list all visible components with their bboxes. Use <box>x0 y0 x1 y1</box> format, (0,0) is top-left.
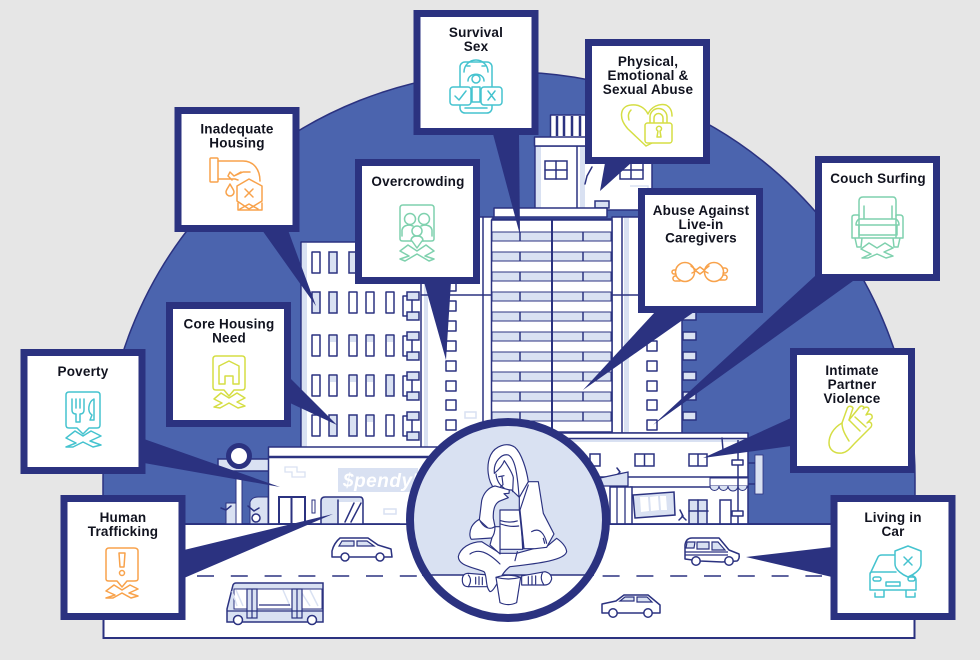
blue semicircle background <box>103 72 915 526</box>
label: Couch Surfing: Couch Surfing <box>830 171 926 186</box>
icon: handcuffs <box>672 262 728 282</box>
callout: Overcrowding <box>358 162 476 360</box>
label: Human Trafficking: Trafficking <box>88 524 158 539</box>
vehicle: van <box>685 538 739 565</box>
road <box>104 524 914 638</box>
callout: Core Housing Need <box>170 306 337 425</box>
icon: car with shield <box>870 546 921 597</box>
label: Intimate Partner Violence: Partner <box>828 377 877 392</box>
icon: heart with padlock <box>622 104 672 146</box>
callout: Poverty <box>24 352 280 487</box>
vehicle: hatchback <box>602 595 660 617</box>
person figure <box>458 445 567 605</box>
label: Survival Sex: Sex <box>464 39 489 54</box>
callout: Survival Sex <box>417 14 535 235</box>
label: Inadequate Housing: Inadequate <box>200 122 274 136</box>
icon: armchair with ribbon <box>852 197 903 258</box>
callout: Intimate Partner Violence <box>703 352 912 470</box>
callout: Human Trafficking <box>64 498 333 616</box>
middle building <box>421 217 493 449</box>
right building with balconies <box>612 217 696 433</box>
central circle: person sitting on the street <box>410 422 606 626</box>
icon: house pin with ribbon <box>213 356 245 408</box>
label: Overcrowding: Overcrowding <box>371 174 465 189</box>
label: Physical, Emotional & Sexual Abuse: Physical, <box>618 54 678 69</box>
label: Poverty: Poverty <box>58 364 109 379</box>
label: Core Housing Need: Core Housing <box>184 316 274 332</box>
label: Living in Car: Car <box>881 524 905 539</box>
right low-rise shops <box>560 433 830 524</box>
icon: raised hand <box>829 406 872 453</box>
central tower <box>492 208 612 432</box>
vehicle: wagon <box>332 538 392 561</box>
rooftop building <box>534 115 652 210</box>
left apartment building <box>301 242 423 448</box>
label: Living in Car: Living in <box>864 510 922 525</box>
vehicle: bus <box>227 583 323 624</box>
label: Abuse Against Live-in Caregivers: Caregivers <box>665 230 737 246</box>
label: Survival Sex: Survival <box>449 25 503 40</box>
label: Inadequate Housing: Housing <box>209 136 265 150</box>
label: Intimate Partner Violence: Violence <box>824 391 881 406</box>
label: Physical, Emotional & Sexual Abuse: Sexual Abuse <box>603 82 694 97</box>
label: Physical, Emotional & Sexual Abuse: Emotional & <box>608 68 689 83</box>
icon: leaking pipe with shield <box>210 158 262 210</box>
storefront with Spendy sign <box>217 447 468 524</box>
icon: exclamation pin with ribbon <box>106 548 138 598</box>
gas station <box>218 446 269 524</box>
label: Human Trafficking: Human <box>100 510 146 525</box>
callout: Abuse Against Live-in Caregivers <box>583 192 760 390</box>
icon: phone with check and cross <box>450 60 502 113</box>
callout: Couch Surfing <box>653 160 936 425</box>
label: Intimate Partner Violence: Intimate <box>825 363 879 378</box>
callout: Inadequate Housing <box>178 110 316 306</box>
icon: family pin with ribbon <box>400 205 434 261</box>
label: Core Housing Need: Need <box>212 330 246 346</box>
label: Abuse Against Live-in Caregivers: Live-in <box>679 217 723 232</box>
callout: Living in Car <box>746 498 952 616</box>
label: Abuse Against Live-in Caregivers: Abuse Against <box>653 203 749 218</box>
callout: Physical, Emotional and Sexual Abuse <box>588 42 706 191</box>
icon: fork and knife pin with ribbon <box>66 392 101 447</box>
storefront with Spendy sign: $pendy's <box>342 471 429 492</box>
